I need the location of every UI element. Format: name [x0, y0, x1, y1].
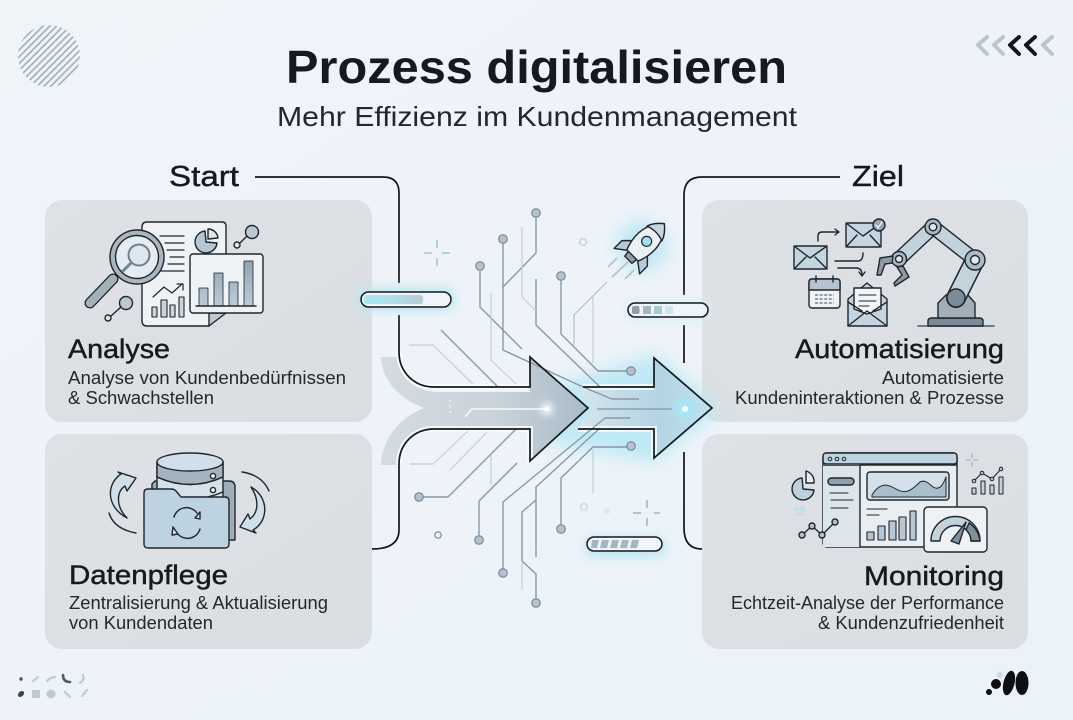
panel: Automatisierung — [702, 200, 1028, 422]
panel: Datenpflege — [45, 434, 372, 649]
icon: report and magnifier — [90, 222, 263, 326]
progress bar right — [624, 298, 712, 322]
logo bottom right — [986, 670, 1028, 696]
arrow: grey input arrow — [381, 357, 588, 465]
icon: dashboard with gauge — [792, 453, 1003, 552]
panel heading: Datenpflege — [69, 560, 228, 590]
heading: Start: Start — [169, 161, 239, 193]
panel heading: Analyse — [68, 334, 170, 364]
connector halo — [399, 352, 654, 464]
icon: rocket — [580, 211, 677, 279]
panel heading: Monitoring — [864, 561, 1004, 591]
panel description: Analyse von Kundenbedürfnissen — [68, 368, 346, 388]
heading: Ziel: Ziel — [852, 161, 904, 193]
circuit lines upper — [409, 209, 639, 399]
arrow highlights — [450, 400, 694, 418]
subtitle: Mehr Effizienz im Kundenmanagement — [277, 101, 797, 132]
icon: mail automation and robot arm — [794, 219, 994, 326]
decorative shapes bottom left — [17, 675, 87, 698]
sparkle lower right — [633, 500, 660, 526]
panel description: Zentralisierung & Aktualisierung — [69, 593, 328, 613]
panel heading: Automatisierung — [795, 334, 1004, 364]
progress bar bottom — [583, 535, 667, 559]
central glow — [540, 354, 720, 462]
connector: Start to flow — [255, 177, 588, 549]
circuit lines lower — [410, 418, 635, 607]
decorative chevrons — [978, 37, 1052, 54]
panel: Analyse — [45, 200, 372, 422]
connector: flow to Ziel — [578, 177, 840, 549]
arrow: blue output arrow — [577, 358, 712, 458]
panel description line 2: & Kundenzufriedenheit — [818, 613, 1004, 633]
progress bar left — [356, 286, 456, 312]
panel description line 2: & Schwachstellen — [68, 388, 214, 408]
panel description line 2: Kundeninteraktionen & Prozesse — [735, 388, 1004, 408]
panel description: Echtzeit-Analyse der Performance — [731, 593, 1004, 613]
title: Prozess digitalisieren — [286, 41, 787, 93]
icon: database folder sync — [109, 453, 269, 548]
panel description line 2: von Kundendaten — [69, 613, 213, 633]
decorative hatched circle — [18, 25, 80, 87]
panel description: Automatisierte — [882, 368, 1004, 388]
panel: Monitoring — [702, 434, 1028, 649]
sparkle upper left — [424, 240, 450, 266]
